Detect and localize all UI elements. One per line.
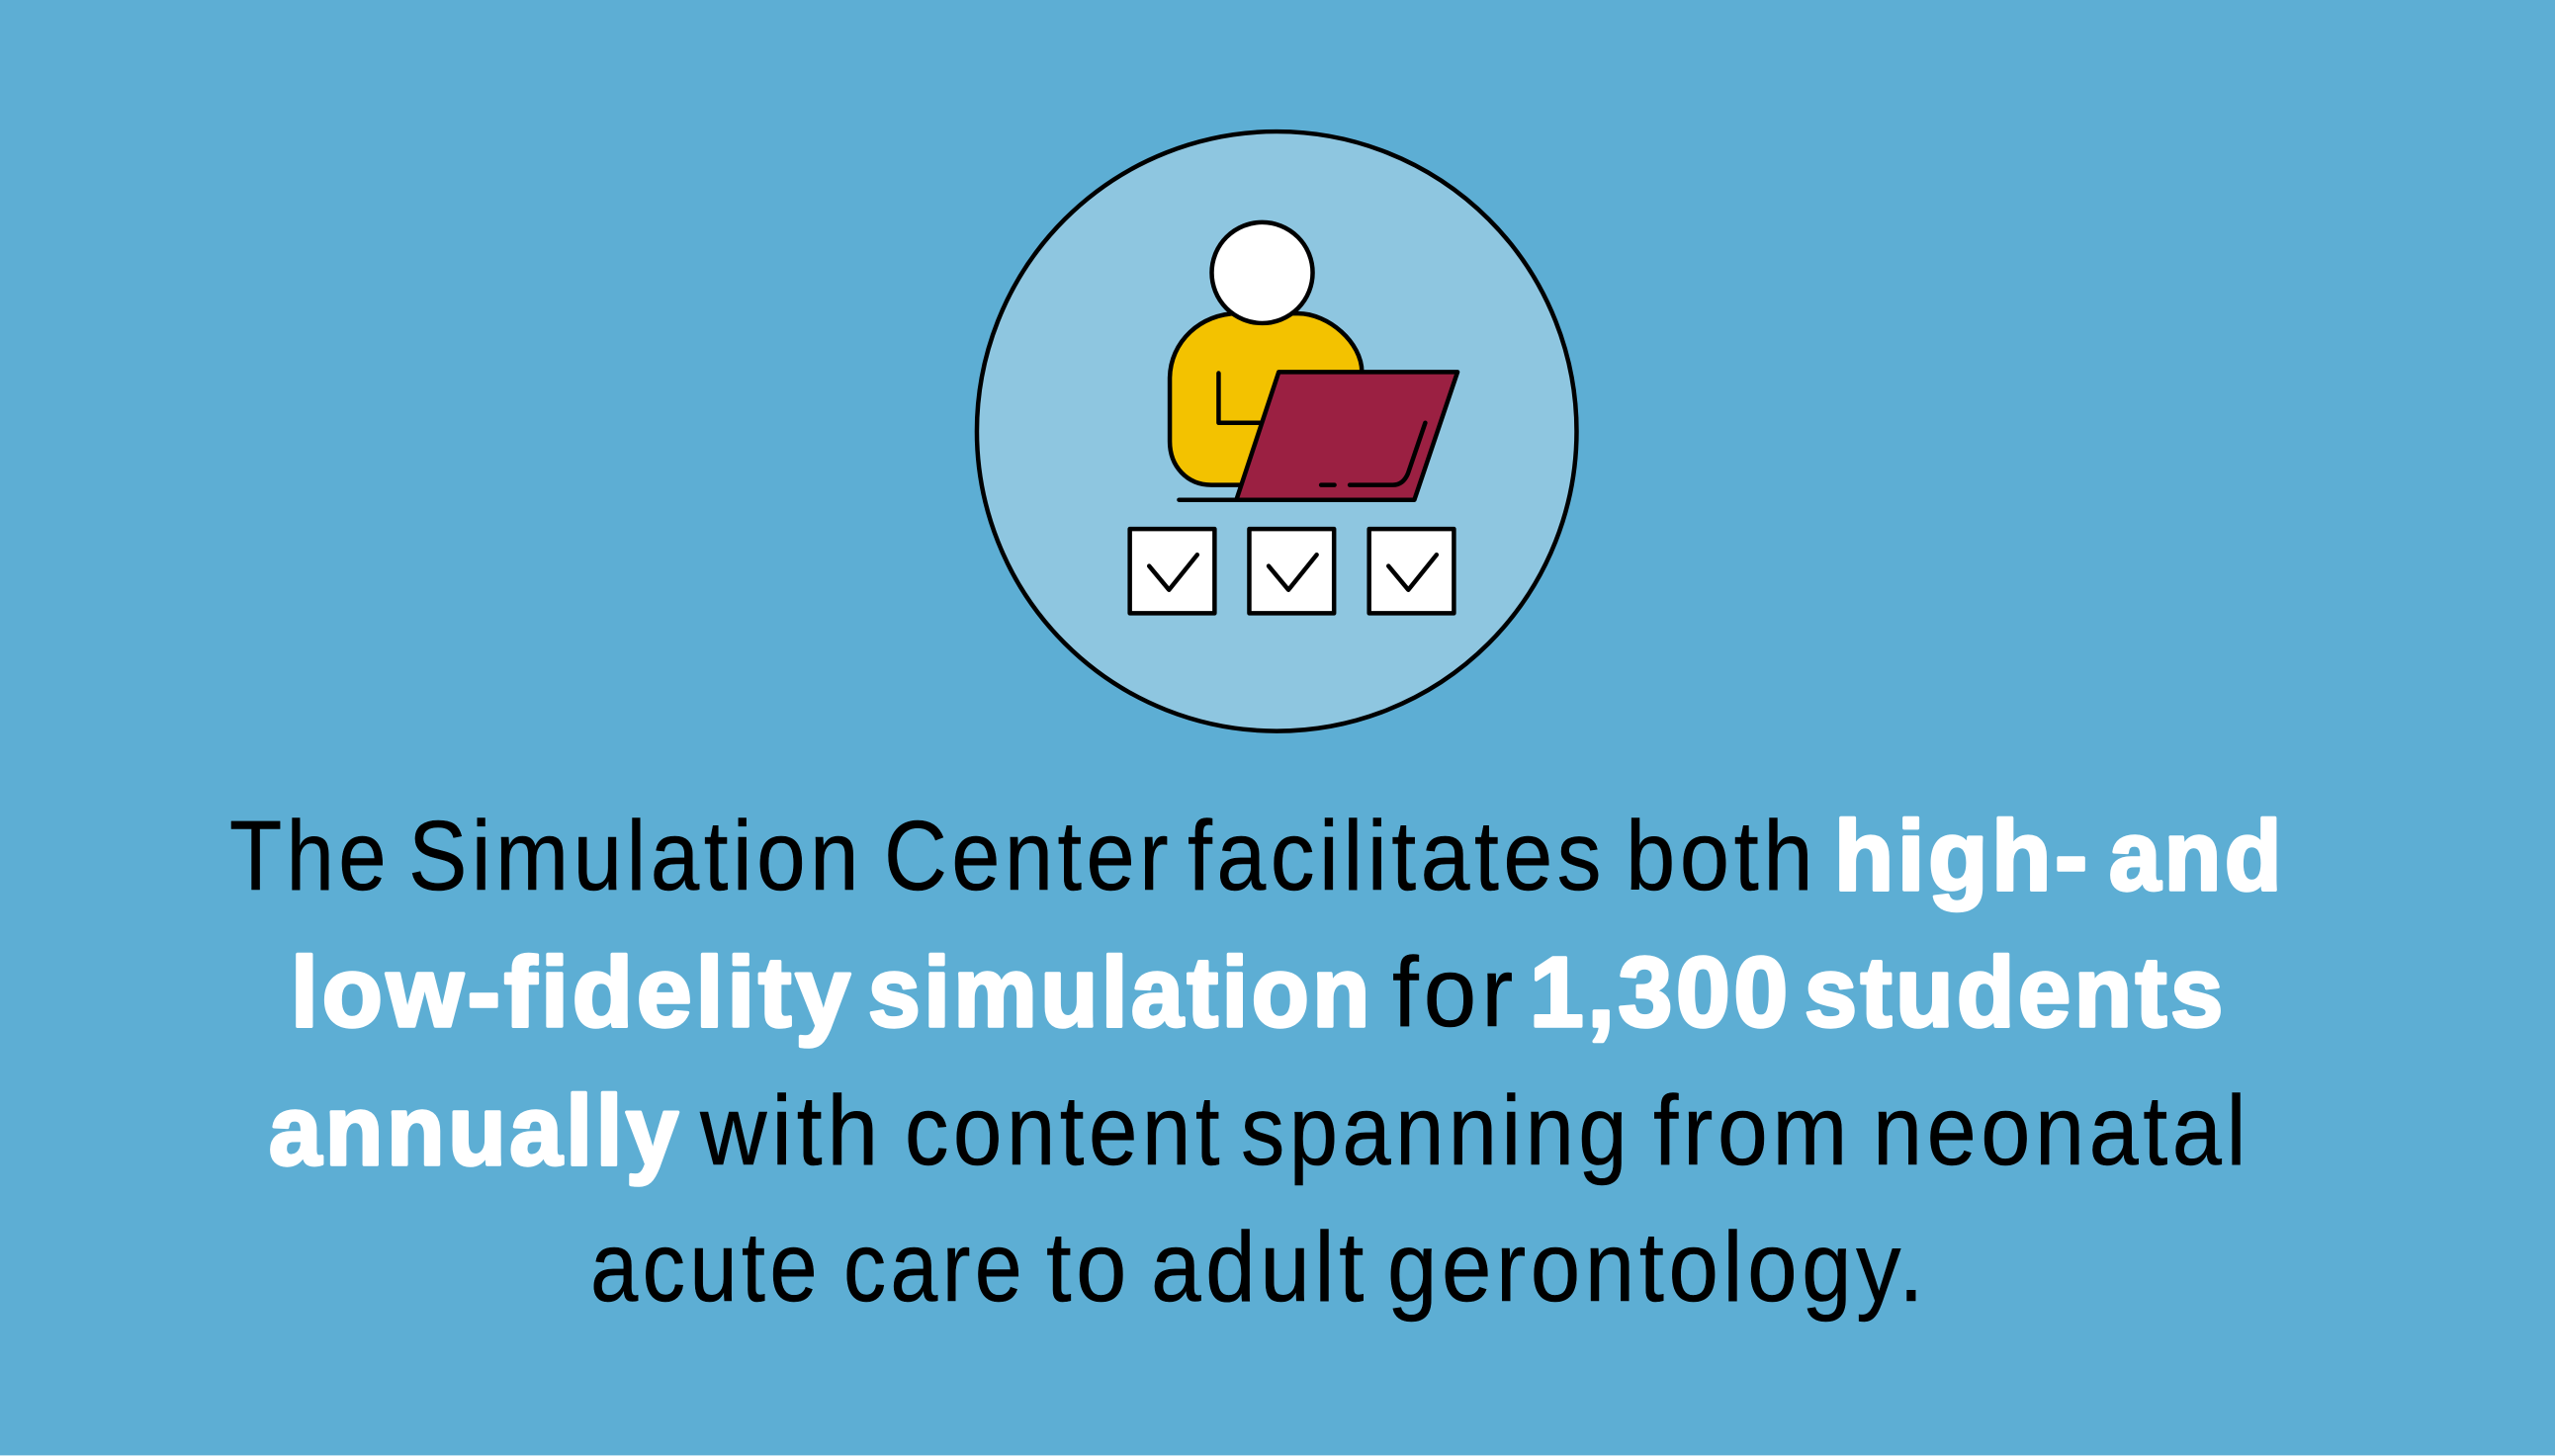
person head xyxy=(1212,222,1313,323)
icon background circle xyxy=(977,131,1576,731)
line 3: from xyxy=(1653,1075,1852,1186)
desk line xyxy=(1179,494,1236,505)
line 1 xyxy=(229,801,2285,911)
line 1: The xyxy=(229,801,391,911)
line 2: students xyxy=(1805,937,2227,1048)
person body outline xyxy=(1170,313,1362,485)
line 2 xyxy=(291,937,2227,1048)
line 1: facilitates xyxy=(1188,801,1606,911)
line 4 xyxy=(590,1212,1928,1323)
line 3: annually xyxy=(269,1075,682,1186)
checkbox 3 xyxy=(1369,529,1454,613)
text block: description xyxy=(229,801,2285,1323)
laptop highlight xyxy=(1321,423,1425,485)
line 2: low-fidelity xyxy=(291,937,854,1048)
checkbox 1 xyxy=(1130,529,1214,613)
person body xyxy=(1170,313,1362,485)
line 1: Center xyxy=(884,801,1173,911)
line 4: acute xyxy=(590,1212,822,1323)
person arm xyxy=(1218,374,1261,423)
line 3: content xyxy=(905,1075,1224,1186)
checkbox 2 xyxy=(1249,529,1334,613)
line 4: care xyxy=(843,1212,1026,1323)
icon: person at laptop with checklist in circle xyxy=(977,131,1576,731)
line 2: simulation xyxy=(868,937,1373,1048)
line 1: Simulation xyxy=(408,801,863,911)
line 3: neonatal xyxy=(1873,1075,2250,1186)
line 3: spanning xyxy=(1241,1075,1631,1186)
line 1: high- xyxy=(1834,801,2091,911)
line 2: for xyxy=(1392,937,1518,1048)
line 4: gerontology. xyxy=(1387,1212,1928,1323)
laptop xyxy=(1236,372,1457,500)
line 1: both xyxy=(1626,801,1817,911)
line 3: with xyxy=(699,1075,883,1186)
line 4: adult xyxy=(1151,1212,1368,1323)
line 3 xyxy=(269,1075,2250,1186)
line 2: 1,300 xyxy=(1530,937,1792,1048)
line 1: and xyxy=(2109,801,2285,911)
line 4: to xyxy=(1046,1212,1131,1323)
